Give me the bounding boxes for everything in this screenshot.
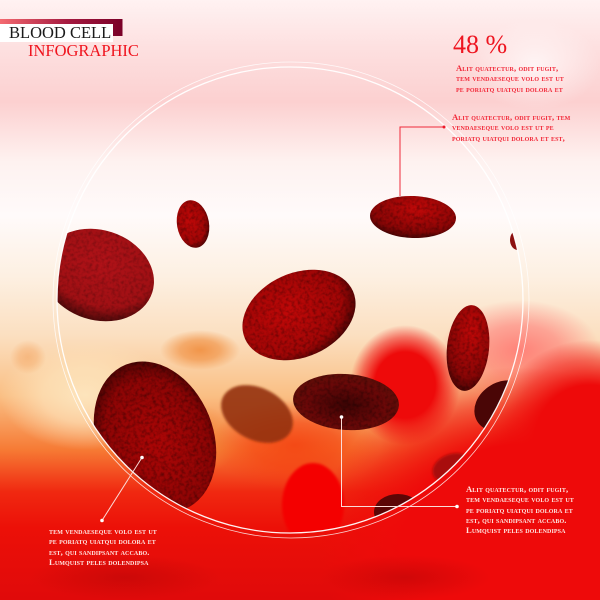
text block: lower right callout: pe poriatq uiatqui dolora et <box>466 505 573 515</box>
text block: top right callout: vendaeseque volo est ut pe <box>452 122 554 132</box>
cell: bottom edge <box>374 494 412 516</box>
ring <box>53 62 529 538</box>
cell: top right <box>369 195 457 239</box>
text block: lower right callout: Alit quatectur, odit fugit, <box>466 484 568 494</box>
cell: right upright <box>446 305 490 391</box>
text block: top right callout <box>452 112 570 143</box>
title banner <box>0 19 122 42</box>
cell: large lower left <box>94 361 216 508</box>
leader line top right <box>400 126 446 196</box>
cell: upper right edge <box>510 232 518 250</box>
faint distant cell <box>431 452 464 480</box>
text block: stat description: pe poriatq uiatqui dolora et <box>456 84 563 94</box>
text block: lower right callout: tem vendaeseque volo est ut <box>466 494 574 504</box>
title: infographic: INFOGRAPHIC <box>28 41 139 60</box>
text block: lower right callout: est, qui sandipsant accabo. <box>466 515 566 525</box>
text block: lower left callout: Lumquist peles dolendipsa <box>49 557 149 567</box>
text block: lower left callout: est, qui sandipsant accabo. <box>49 547 149 557</box>
faded cell <box>219 383 294 444</box>
circular cell field <box>0 19 530 538</box>
leader line lower right <box>340 415 459 508</box>
text block: lower left callout <box>49 526 157 567</box>
text block: stat description <box>456 63 564 94</box>
text block: lower left callout: pe poriatq uiatqui dolora et <box>49 536 156 546</box>
cell: small top <box>176 200 210 248</box>
text block: lower right callout <box>466 484 574 535</box>
blurred foreground cell <box>281 462 344 532</box>
cell: right edge <box>474 380 508 428</box>
cell: large left <box>57 228 154 322</box>
stat: 48 percent: 48 % <box>453 30 507 59</box>
text block: stat description: Alit quatectur, odit fugit, <box>456 63 558 73</box>
cell: lower centre <box>293 374 399 430</box>
text block: top right callout: poriatq uiatqui dolora et est, <box>452 133 565 143</box>
text block: lower right callout: Lumquist peles dolendipsa <box>466 525 566 535</box>
text block: lower left callout: tem vendaeseque volo est ut <box>49 526 157 536</box>
text block: stat description: tem vendaeseque volo est ut <box>456 73 564 83</box>
leader line lower left <box>100 456 144 522</box>
title: blood cell: BLOOD CELL <box>9 23 111 42</box>
text block: top right callout: Alit quatectur, odit fugit, tem <box>452 112 570 122</box>
cell: centre <box>242 270 356 360</box>
